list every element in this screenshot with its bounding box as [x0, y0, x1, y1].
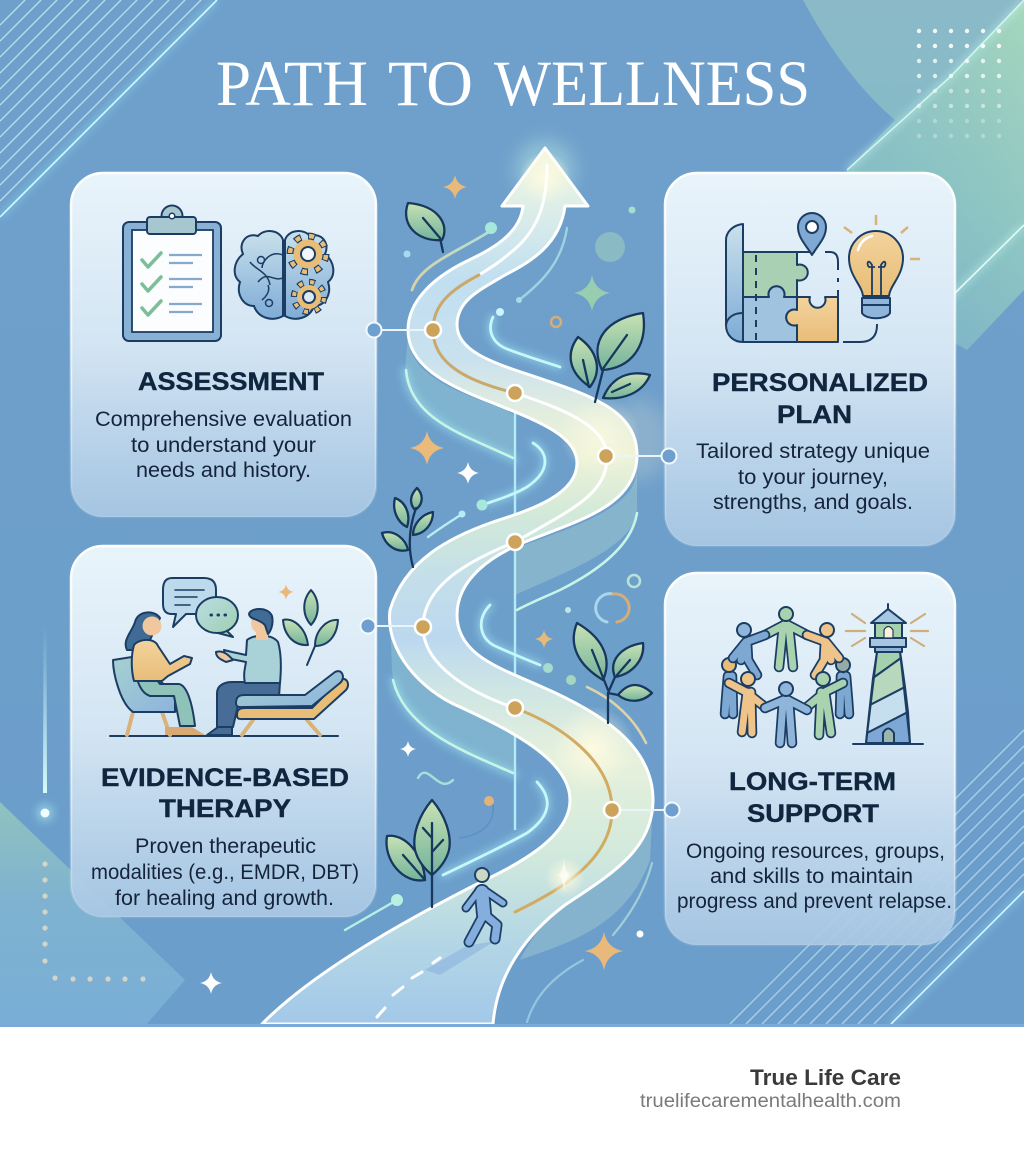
gears [290, 236, 326, 272]
bottom-right glow line [891, 891, 1024, 1024]
heading: SUPPORT [747, 800, 879, 828]
dotted corner [42, 861, 146, 982]
heading: THERAPY [159, 795, 291, 823]
connector lines [368, 330, 672, 810]
card: long-term support [665, 573, 955, 945]
icon: clipboard [123, 206, 221, 341]
top-right glow lines [847, 0, 1024, 298]
description: Proven therapeutic [135, 835, 316, 858]
vertical cyan stem [512, 393, 518, 830]
upper-right person [807, 635, 839, 675]
title: PATH [216, 48, 368, 120]
dot grid [917, 29, 1001, 138]
description: Comprehensive evaluation [95, 408, 352, 431]
description: strengths, and goals. [713, 491, 913, 514]
centre line [423, 165, 612, 912]
description: modalities (e.g., EMDR, DBT) [91, 861, 359, 884]
connectors and nodes [360, 322, 680, 818]
description: progress and prevent relapse. [677, 890, 952, 913]
description: needs and history. [136, 459, 311, 482]
description: for healing and growth. [115, 887, 334, 910]
plant bottom [386, 800, 450, 907]
brand name: True Life Care [750, 1065, 901, 1090]
icon: therapy session [110, 578, 348, 736]
title: TO [388, 48, 473, 120]
white sparkle [200, 972, 222, 994]
heading: LONG-TERM [729, 768, 896, 796]
leaves [382, 203, 652, 907]
bottom-right hatch lines [730, 730, 1024, 1024]
road dashes [377, 958, 440, 1017]
footer [0, 1024, 1024, 1154]
description [696, 440, 930, 514]
icon: map and puzzle [726, 213, 920, 342]
decorative elements around the path [391, 175, 644, 970]
walker shadow [425, 941, 495, 975]
front centre person [765, 699, 807, 743]
title [216, 48, 810, 120]
far left person [725, 676, 733, 714]
decorative glow curves [345, 228, 652, 1022]
front-right person [807, 683, 843, 735]
card: personalized plan [665, 173, 955, 546]
sparkle [278, 584, 294, 600]
description: to your journey, [738, 466, 888, 489]
description: Ongoing resources, groups, [686, 840, 945, 863]
man [217, 682, 280, 727]
location pin [798, 213, 826, 255]
upper-left person [733, 635, 765, 675]
heading: EVIDENCE-BASED [101, 764, 349, 792]
stars [443, 175, 467, 199]
top-right teal panel [800, 0, 1024, 350]
heading: PLAN [777, 401, 852, 429]
description: Tailored strategy unique [696, 440, 930, 463]
chaise [242, 720, 320, 735]
icon: lighthouse [846, 604, 928, 744]
description [95, 408, 352, 482]
heading: ASSESSMENT [138, 368, 324, 396]
leaf upper left [406, 203, 444, 252]
front-left person [729, 683, 765, 733]
top-right mint corner [847, 0, 1024, 350]
vertical glow line [36, 625, 54, 822]
ribbon shadow folds [390, 140, 670, 960]
description: and skills to maintain [710, 865, 913, 888]
heading [729, 768, 896, 828]
ring arc [596, 594, 613, 622]
lightbulb [849, 231, 903, 296]
woman [136, 652, 195, 726]
heading [101, 764, 349, 823]
path ribbon [262, 148, 653, 1024]
dots [485, 222, 497, 234]
path nodes [415, 322, 620, 818]
card: assessment [71, 173, 376, 517]
top person [765, 624, 807, 667]
heading [712, 369, 928, 429]
chair [127, 712, 170, 735]
title: WELLNESS [494, 48, 810, 120]
bottom-left teal panel [0, 802, 185, 1026]
small plant left [382, 488, 433, 567]
heading: PERSONALIZED [712, 369, 928, 397]
description [91, 835, 359, 910]
top-left glow line [0, 0, 217, 217]
speech bubbles [163, 578, 216, 627]
far right person [840, 676, 849, 714]
walking figure [466, 868, 503, 942]
card: evidence-based therapy [71, 546, 376, 917]
plant upper right [571, 313, 650, 402]
ribbon body and arrow [262, 148, 653, 1024]
glow spots [551, 706, 635, 790]
card nodes [360, 322, 680, 818]
plant lower right [574, 623, 652, 723]
description [677, 840, 952, 913]
plant [304, 590, 318, 625]
website: truelifecarementalhealth.com [640, 1091, 901, 1112]
icon: community circle [722, 607, 850, 743]
top-left hatch lines [0, 0, 201, 201]
description: to understand your [131, 434, 316, 457]
icon: brain with gears [235, 231, 333, 319]
